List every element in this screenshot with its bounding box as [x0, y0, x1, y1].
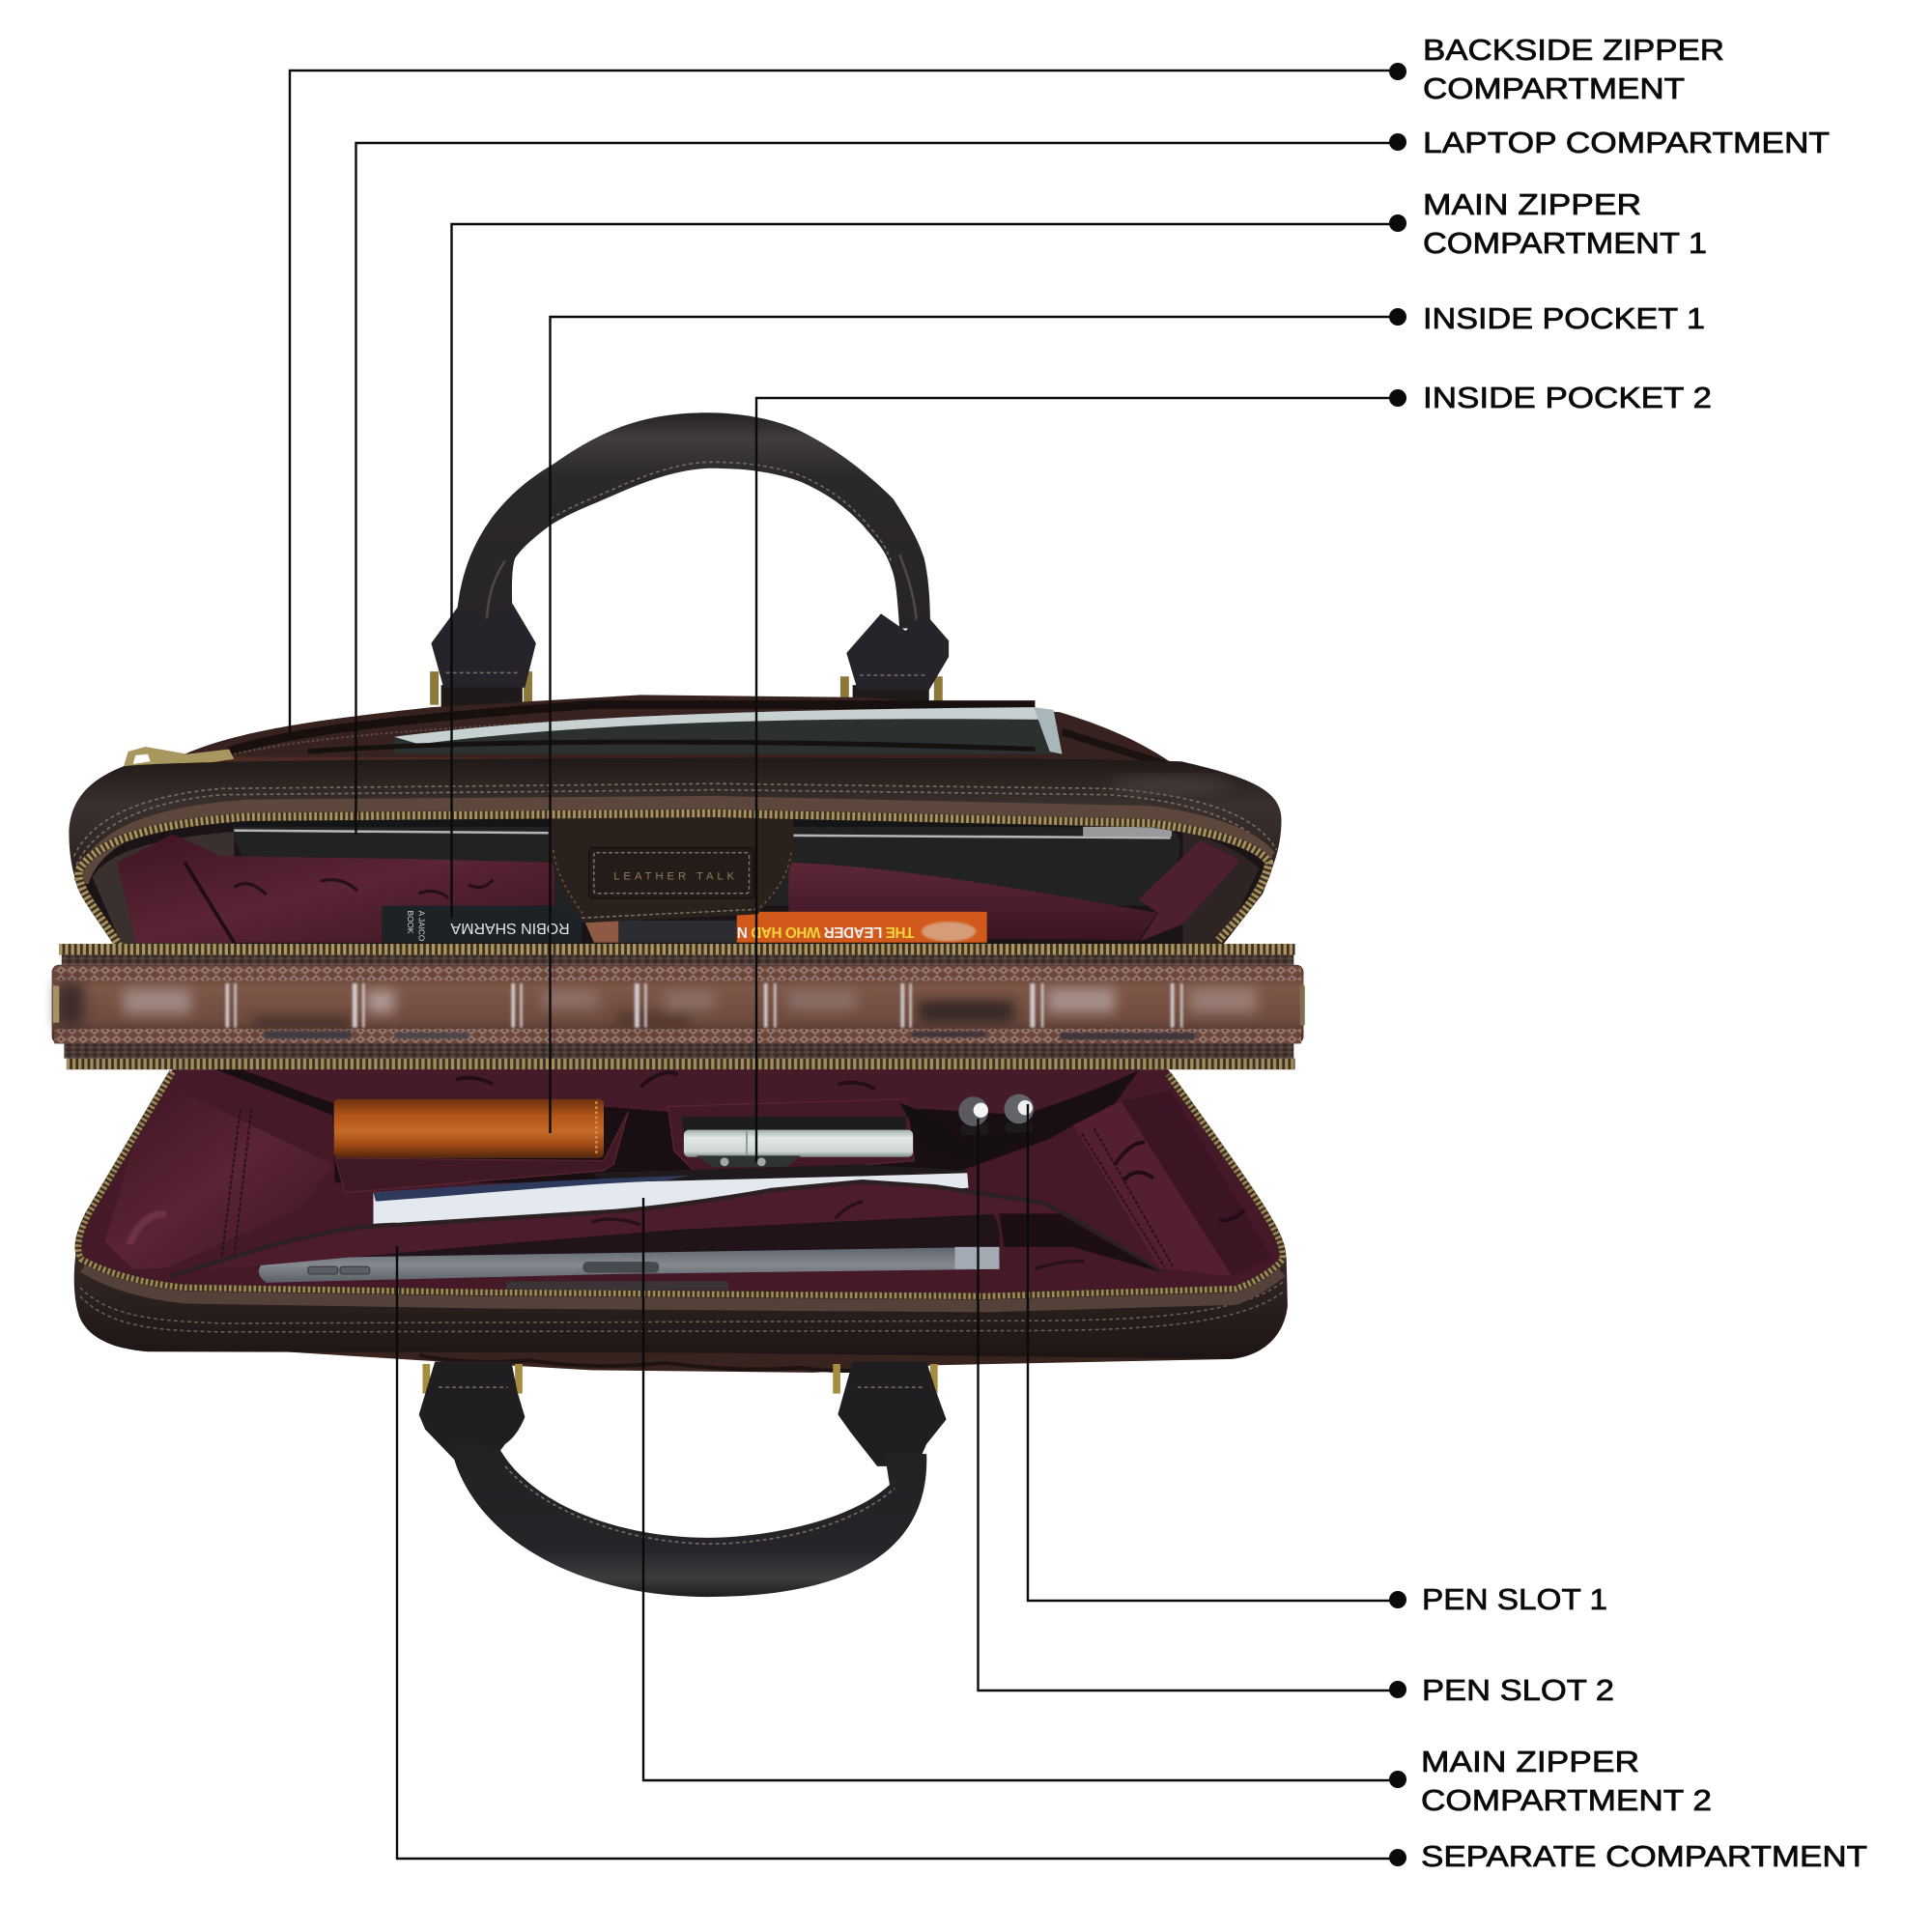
label: main zipper compartment 1: COMPARTMENT 1 [1423, 226, 1707, 260]
branded leather tab: LEATHER TALK [613, 871, 735, 883]
label: separate compartment: SEPARATE COMPARTMENT [1421, 1839, 1867, 1873]
label: backside zipper compartment: COMPARTMENT [1423, 71, 1685, 105]
leader: separate compartment [397, 1246, 1398, 1859]
bottom handle tabs [419, 1361, 947, 1466]
leader: pen slot 1 [1028, 1104, 1398, 1601]
backside zipper panel [185, 695, 1177, 770]
books: BOOK [406, 911, 415, 934]
leader: main zipper compartment 1 [452, 224, 1398, 919]
label: backside zipper compartment: BACKSIDE ZIPPER [1423, 33, 1724, 67]
inside pocket 1 flap [335, 1112, 629, 1193]
leader: pen slot 2 [978, 1119, 1398, 1690]
books: ROBIN SHARMA [450, 920, 570, 936]
label: pen slot 1: PEN SLOT 1 [1422, 1582, 1607, 1616]
label: main zipper compartment 2: COMPARTMENT 2 [1421, 1783, 1712, 1817]
label: main zipper compartment 2: MAIN ZIPPER [1421, 1745, 1639, 1778]
lower bag leather [74, 1242, 1288, 1373]
spine croc leather [52, 965, 1305, 1043]
tablet back [259, 1213, 1000, 1269]
upper lining [117, 835, 1240, 943]
label: pen slot 2: PEN SLOT 2 [1422, 1673, 1614, 1707]
upper interior [78, 813, 1269, 949]
bottom handle [450, 1439, 926, 1597]
pen slots with pens [899, 1094, 1035, 1164]
leader lines and dots [290, 63, 1406, 1866]
label: main zipper compartment 2 [1421, 1745, 1712, 1817]
inside pocket 2 [668, 1099, 914, 1179]
spine lower zipper [64, 1043, 1295, 1069]
leader: inside pocket 1 [551, 317, 1398, 1133]
label: backside zipper compartment [1423, 33, 1724, 105]
leader: inside pocket 2 [756, 398, 1398, 1162]
lower interior lining [78, 1067, 1283, 1296]
right lining wing [1073, 1091, 1271, 1276]
left lining wing [104, 1091, 332, 1269]
notebook papers [373, 1164, 969, 1230]
center spine [52, 944, 1305, 1069]
leader: backside zipper compartment [290, 71, 1398, 733]
books: THE LEADER WHO HAD N [737, 923, 914, 940]
tablet edge [259, 1247, 1000, 1290]
branded leather tab [551, 813, 793, 923]
books: A JAICO [417, 911, 427, 942]
top handle right tab [840, 612, 949, 707]
spine upper zipper [59, 944, 1295, 965]
upper lid leather [69, 757, 1282, 949]
label: laptop compartment: LAPTOP COMPARTMENT [1423, 126, 1830, 159]
top handle left tab [430, 604, 536, 707]
laptop sheet in back compartment [308, 707, 1062, 754]
dots [1389, 63, 1406, 1866]
label: inside pocket 2: INSIDE POCKET 2 [1423, 381, 1712, 414]
top handle [456, 412, 930, 629]
label: inside pocket 1: INSIDE POCKET 1 [1423, 301, 1705, 335]
leader: main zipper compartment 2 [643, 1198, 1398, 1780]
lower main zipper [78, 1072, 1283, 1306]
front pocket flap [170, 1181, 1159, 1276]
books [382, 905, 987, 943]
leader: laptop compartment [355, 143, 1398, 835]
upper main zipper [78, 804, 1269, 947]
laptop [234, 817, 1182, 905]
label: main zipper compartment 1: MAIN ZIPPER [1423, 187, 1641, 221]
label: main zipper compartment 1 [1423, 187, 1707, 260]
bag photo [52, 412, 1305, 1597]
wallet in inside pocket 1 [334, 1099, 604, 1158]
zipper pull [124, 747, 234, 768]
